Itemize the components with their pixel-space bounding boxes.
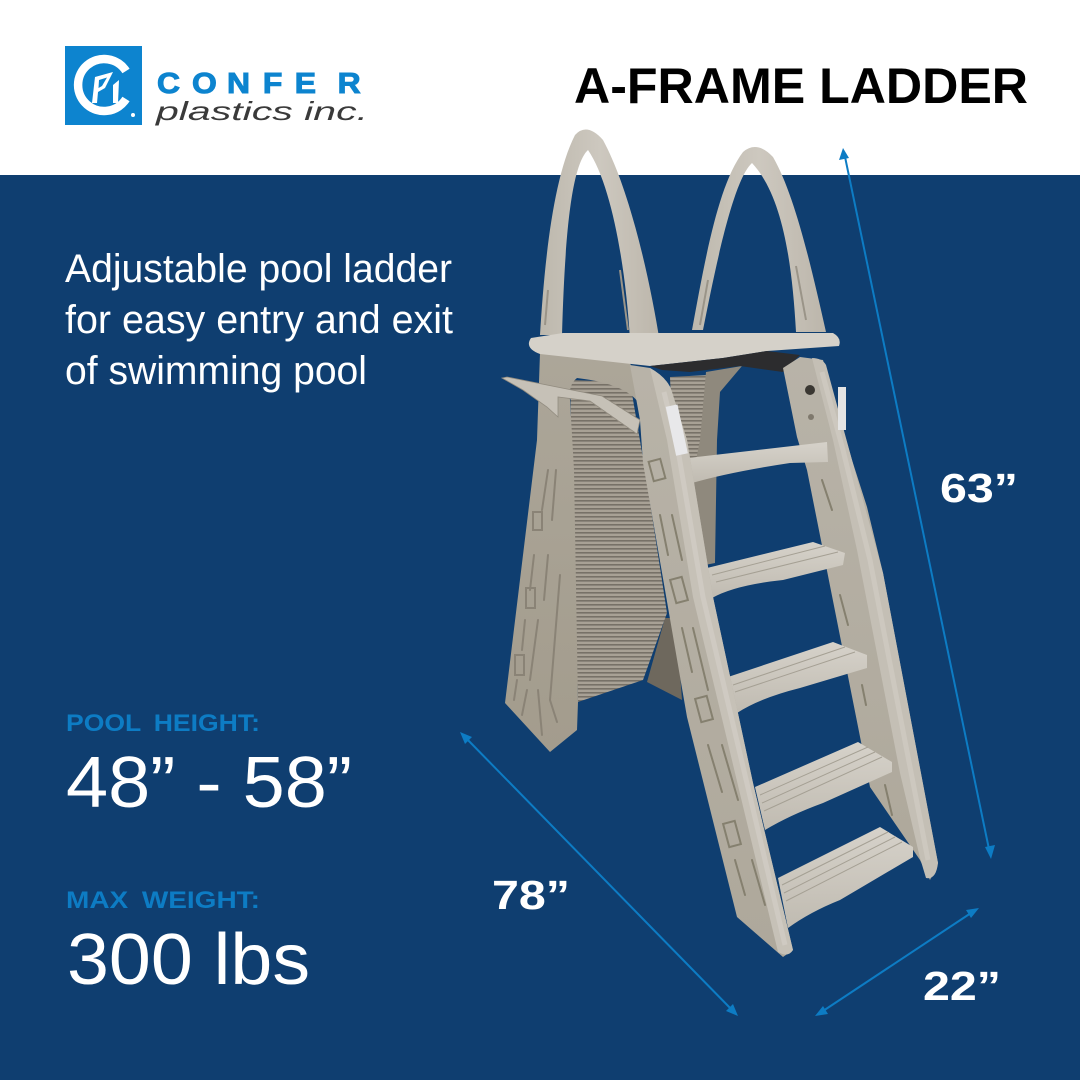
- ladder: panel details: [649, 459, 892, 905]
- ladder: rear frame: [505, 353, 742, 752]
- ladder: left front rail: [650, 368, 793, 955]
- description text: for easy entry and exit: [65, 298, 453, 342]
- ladder: frame holes: [805, 385, 815, 420]
- spec value: 300 lbs: [67, 920, 310, 1000]
- description text: of swimming pool: [65, 349, 367, 393]
- ladder: left front panel: [630, 365, 793, 957]
- ladder: side handle: [502, 377, 640, 434]
- spec: max weight: [66, 887, 310, 1000]
- title: A-FRAME LADDER: [574, 58, 1028, 114]
- spec label: POOL HEIGHT:: [66, 710, 260, 737]
- logo wordmark: CONFER: [157, 67, 361, 100]
- ladder: left handrail arch: [540, 130, 660, 343]
- ladder: platform: [529, 333, 840, 372]
- logo subtitle: plastics inc.: [154, 96, 368, 126]
- icon: CPI emblem: [65, 46, 142, 125]
- ladder: rungs: [688, 442, 913, 928]
- dimension label: 63: 63”: [940, 465, 1018, 511]
- ladder photo illustration: [502, 130, 938, 957]
- ladder: right side panel: [783, 357, 938, 880]
- ladder: right handrail arch: [692, 147, 826, 332]
- description text: Adjustable pool ladder: [65, 247, 452, 291]
- arrow: 22 inch width: [815, 908, 979, 1016]
- arrow: 63 inch height: [839, 148, 995, 859]
- dimension label: 22: 22”: [923, 963, 1001, 1009]
- ladder: right rail: [812, 358, 938, 878]
- spec: pool height: [66, 710, 352, 823]
- spec value: 48” - 58”: [66, 743, 352, 823]
- logo: Confer Plastics: [65, 46, 368, 126]
- arrow: 78 inch depth: [460, 732, 738, 1016]
- dimension label: 78: 78”: [492, 872, 570, 918]
- description text: [65, 247, 453, 393]
- ladder: warning stickers: [666, 387, 846, 456]
- spec label: MAX WEIGHT:: [66, 887, 260, 914]
